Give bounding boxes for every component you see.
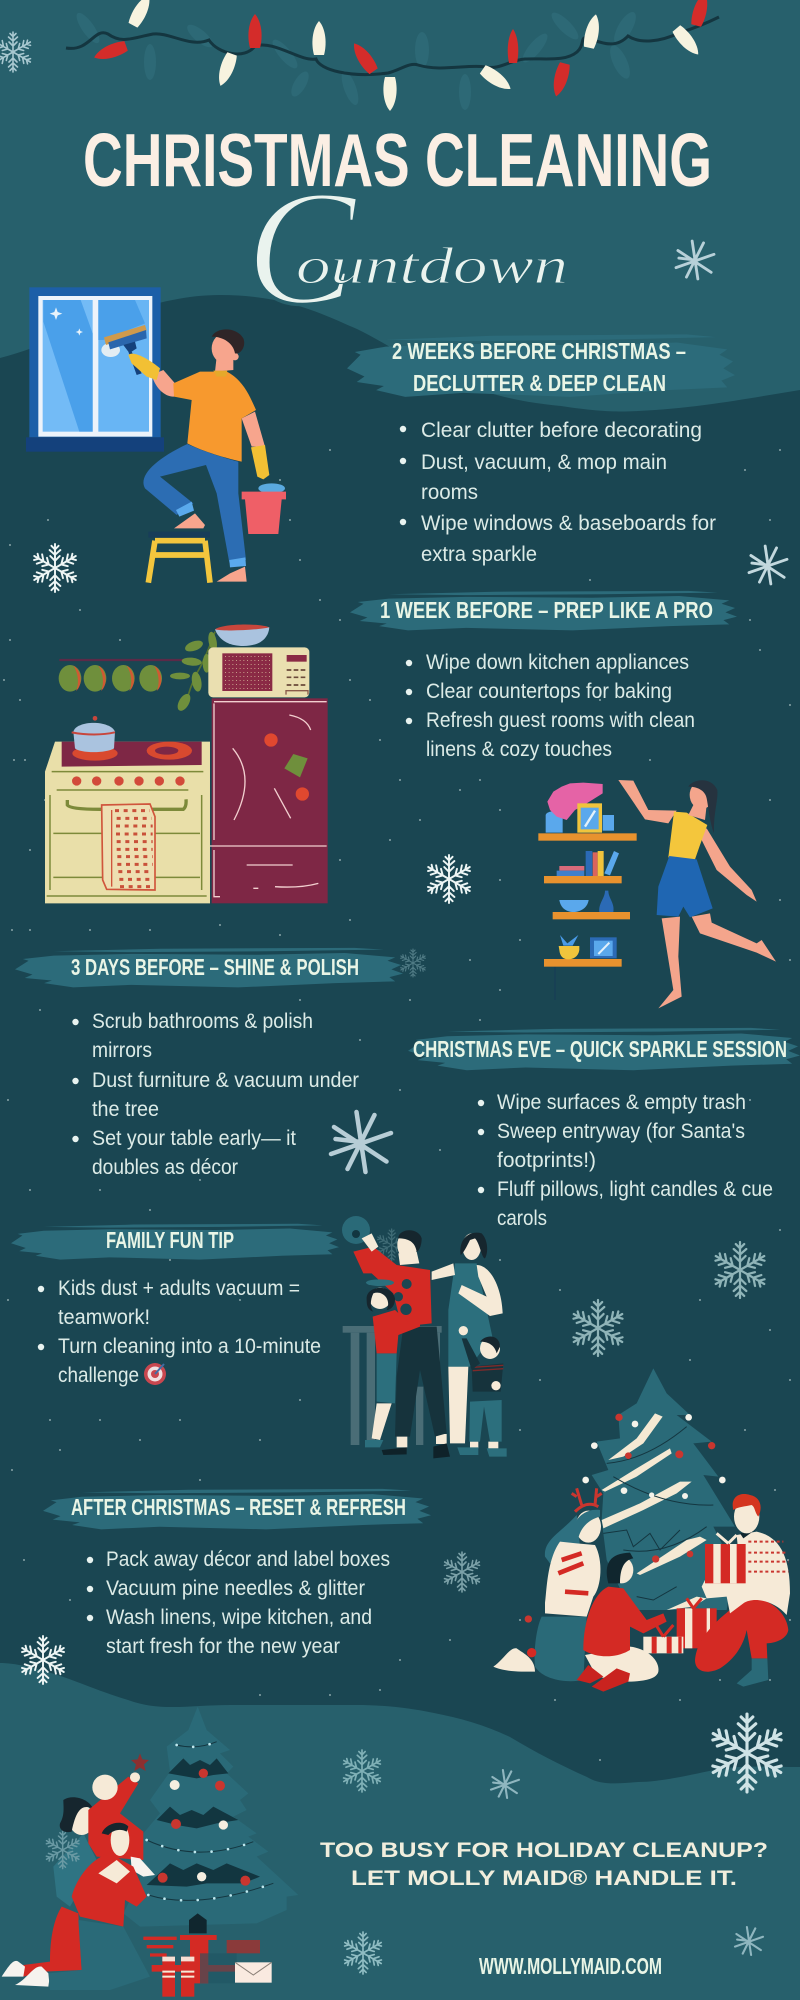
dim snowflake behind family bbox=[376, 1229, 407, 1261]
shelves bbox=[538, 783, 637, 1000]
heading text: 3 DAYS BEFORE – SHINE & POLISH bbox=[71, 954, 359, 980]
illustration: woman dusting shelves bbox=[538, 780, 776, 1008]
star snowflake right of first list bbox=[749, 546, 787, 584]
heading text: 2 WEEKS BEFORE CHRISTMAS – bbox=[392, 338, 686, 364]
snowflake footer center top bbox=[341, 1750, 383, 1792]
mug rack bbox=[59, 660, 183, 692]
section: family fun tip bbox=[11, 1224, 339, 1387]
illustration: man washing window bbox=[26, 287, 286, 583]
bucket bbox=[242, 483, 286, 534]
bullet list: Vacuum pine needles & glitter bbox=[106, 1577, 365, 1600]
bullet list: start fresh for the new year bbox=[106, 1635, 340, 1658]
bullet list bbox=[38, 1277, 321, 1387]
snowflake beside after christmas list bbox=[442, 1552, 482, 1592]
bullet list: Fluff pillows, light candles & cue bbox=[497, 1178, 773, 1201]
bullet list: Clear countertops for baking bbox=[426, 680, 672, 703]
small star footer right bbox=[735, 1927, 763, 1955]
window bbox=[26, 287, 164, 452]
christmas tree bbox=[525, 1368, 735, 1623]
heading banner bbox=[15, 948, 403, 987]
bullet list bbox=[400, 419, 716, 566]
snowflake footer center bottom bbox=[342, 1932, 384, 1974]
script subtitle: ountdown bbox=[296, 238, 568, 295]
man figure bbox=[128, 329, 269, 582]
stool bbox=[343, 1326, 442, 1445]
pine tree bbox=[123, 1707, 298, 1933]
son bbox=[457, 1326, 507, 1457]
snowflake lower left of first scene bbox=[32, 544, 78, 592]
heading text: DECLUTTER & DEEP CLEAN bbox=[413, 370, 666, 396]
woman figure bbox=[618, 780, 776, 1008]
bullet list: carols bbox=[497, 1207, 547, 1230]
speckled snow texture bbox=[4, 450, 790, 1760]
bullet list: footprints!) bbox=[497, 1149, 596, 1172]
bullet list: challenge bbox=[58, 1364, 139, 1387]
website: WWW.MOLLYMAID.COM bbox=[479, 1953, 662, 1979]
decoration: string of Christmas lights bbox=[66, 0, 719, 111]
bullet list: rooms bbox=[421, 481, 478, 504]
bullet list: Dust furniture & vacuum under bbox=[92, 1069, 359, 1092]
bullet list: Scrub bathrooms & polish bbox=[92, 1010, 313, 1033]
heading banner bbox=[11, 1224, 339, 1260]
large star snowflake bbox=[331, 1112, 391, 1172]
bullet list: Wash linens, wipe kitchen, and bbox=[106, 1606, 372, 1629]
dim snowflake next to banner bbox=[399, 949, 427, 977]
icon: target bbox=[144, 1363, 166, 1385]
bullet list: doubles as décor bbox=[92, 1156, 238, 1179]
bullet list: Kids dust + adults vacuum = bbox=[58, 1277, 300, 1300]
woman and child bbox=[2, 1753, 155, 1987]
big snowflake bottom right bbox=[709, 1714, 785, 1792]
illustration: family with tree in footer bbox=[2, 1707, 298, 1997]
section: after christmas bbox=[43, 1489, 431, 1658]
bullet list: Pack away décor and label boxes bbox=[106, 1548, 390, 1571]
call to action bbox=[320, 1839, 768, 1890]
section: 1 week before bbox=[350, 591, 737, 761]
bullet list: Clear clutter before decorating bbox=[421, 419, 702, 442]
heading text: FAMILY FUN TIP bbox=[106, 1227, 234, 1253]
wreath bbox=[342, 1216, 370, 1244]
mother bbox=[432, 1233, 503, 1443]
kneeling man bbox=[48, 1823, 150, 1990]
bullet list: Sweep entryway (for Santa's bbox=[497, 1120, 745, 1143]
small star footer bbox=[491, 1770, 519, 1798]
father bbox=[353, 1230, 450, 1458]
call to action: TOO BUSY FOR HOLIDAY CLEANUP? bbox=[320, 1839, 768, 1862]
heading text bbox=[392, 338, 686, 396]
heading banner bbox=[408, 1028, 800, 1070]
call to action: LET MOLLY MAID® HANDLE IT. bbox=[351, 1867, 737, 1890]
heading text: 1 WEEK BEFORE – PREP LIKE A PRO bbox=[380, 597, 713, 623]
bullet list: extra sparkle bbox=[421, 543, 537, 566]
bullet list: Wipe down kitchen appliances bbox=[426, 651, 689, 674]
child in red bbox=[577, 1553, 667, 1692]
snowflake top left bbox=[0, 32, 33, 72]
squeegee bbox=[101, 325, 147, 375]
bullet list bbox=[478, 1091, 773, 1230]
bullet list bbox=[87, 1548, 390, 1658]
snowflake beside kitchen bbox=[426, 855, 472, 903]
heading text: AFTER CHRISTMAS – RESET & REFRESH bbox=[71, 1494, 406, 1520]
bullet list: Turn cleaning into a 10-minute bbox=[58, 1335, 321, 1358]
illustration: family decorating bbox=[342, 1216, 507, 1458]
section: 3 days before bbox=[15, 948, 403, 1179]
bullet list: mirrors bbox=[92, 1039, 152, 1062]
bullet list: Wipe windows & baseboards for bbox=[421, 512, 716, 535]
gifts on the floor bbox=[643, 1598, 717, 1653]
bullet list: Dust, vacuum, & mop main bbox=[421, 451, 667, 474]
bullet list: Refresh guest rooms with clean bbox=[426, 709, 695, 732]
gifts and socks bbox=[143, 1935, 272, 1997]
bullet list bbox=[406, 651, 695, 761]
section: 2 weeks before bbox=[347, 334, 735, 566]
daughter bbox=[365, 1279, 420, 1447]
heading banner bbox=[350, 591, 737, 630]
stove bbox=[45, 742, 210, 903]
snowflake right bbox=[713, 1242, 767, 1298]
bullet list: teamwork! bbox=[58, 1306, 150, 1329]
heading banner bbox=[347, 334, 735, 397]
woman with antlers bbox=[493, 1488, 602, 1681]
hanging plant bbox=[170, 631, 218, 713]
fridge bbox=[210, 698, 328, 903]
illustration: kitchen bbox=[45, 625, 328, 903]
dish towel bbox=[102, 804, 155, 890]
heading banner bbox=[43, 1489, 431, 1529]
man in sweater bbox=[695, 1494, 790, 1687]
step stool bbox=[148, 532, 210, 583]
bullet list bbox=[72, 1010, 359, 1179]
bullet list: linens & cozy touches bbox=[426, 738, 612, 761]
script subtitle: C bbox=[246, 156, 358, 339]
snowflake left bottom bbox=[20, 1636, 66, 1684]
snowflake center right bbox=[571, 1300, 625, 1356]
background: dark middle wave bbox=[0, 295, 800, 1783]
bullet list: Set your table early— it bbox=[92, 1127, 296, 1150]
section: christmas eve bbox=[408, 1028, 800, 1230]
illustration: family around tree bbox=[493, 1368, 790, 1692]
bullet list: the tree bbox=[92, 1098, 159, 1121]
bowl bbox=[215, 625, 269, 646]
bullet list: Wipe surfaces & empty trash bbox=[497, 1091, 746, 1114]
pot bbox=[72, 716, 115, 752]
star snowflake near title bbox=[676, 241, 714, 279]
microwave bbox=[208, 647, 309, 697]
